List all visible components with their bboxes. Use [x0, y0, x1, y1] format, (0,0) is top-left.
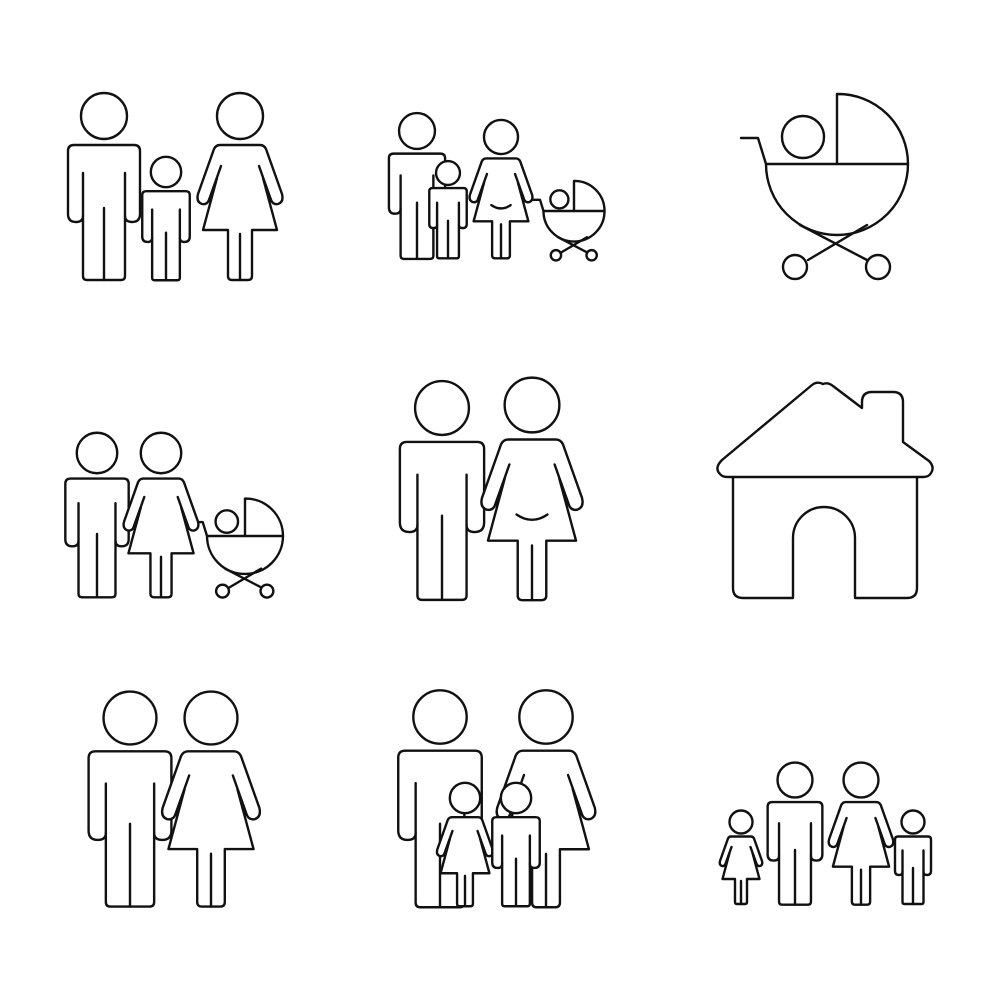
pregnant woman — [470, 120, 532, 258]
icon: couple with stroller — [65, 433, 283, 598]
man — [768, 763, 822, 905]
woman — [497, 690, 595, 907]
man — [400, 381, 484, 600]
icon: baby stroller — [741, 94, 908, 279]
icon: family with two children — [398, 690, 595, 907]
icon: house — [717, 383, 933, 598]
girl — [437, 783, 493, 906]
stroller — [194, 499, 283, 598]
man — [65, 433, 129, 597]
boy — [142, 157, 190, 280]
icon: family man child woman — [68, 93, 282, 280]
woman — [829, 763, 893, 905]
woman — [162, 692, 260, 907]
man — [389, 113, 445, 259]
man — [68, 93, 140, 280]
boy — [895, 810, 931, 904]
girl — [720, 810, 762, 904]
stroller — [533, 181, 605, 260]
man — [89, 692, 171, 907]
boy — [429, 161, 467, 258]
icon: family with pregnant mother and stroller — [389, 113, 605, 260]
icon: couple pregnant — [400, 378, 583, 600]
icon: couple — [89, 692, 260, 907]
boy — [492, 783, 540, 906]
pregnant woman — [481, 378, 583, 600]
woman — [124, 433, 198, 597]
man — [398, 690, 482, 907]
woman — [198, 93, 282, 280]
icon: family of four in row — [720, 763, 931, 905]
